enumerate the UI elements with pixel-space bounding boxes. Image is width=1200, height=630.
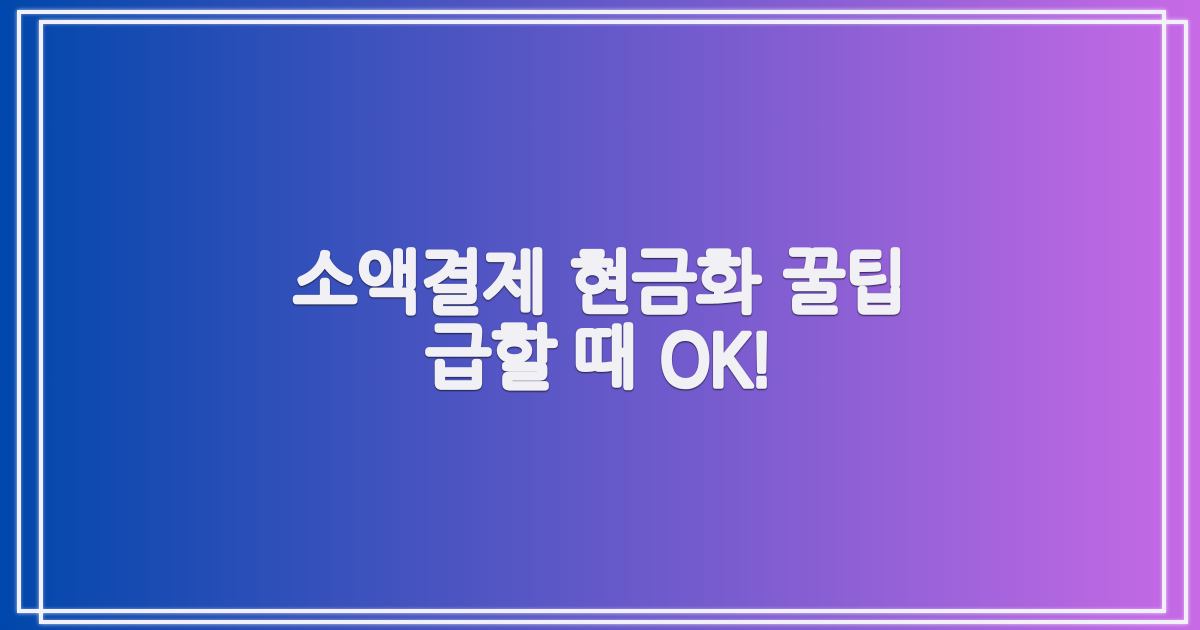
title line 2: 때 [574, 320, 637, 396]
title line 1: 현금화 [569, 245, 760, 321]
title line 1: 소액결제 [293, 246, 547, 321]
title line 2 [426, 317, 770, 402]
title line 2: 급할 [426, 320, 556, 396]
title line 1 [293, 245, 906, 321]
title line 1: 꿀팁 [784, 246, 906, 321]
title line 2: OK! [661, 317, 770, 402]
